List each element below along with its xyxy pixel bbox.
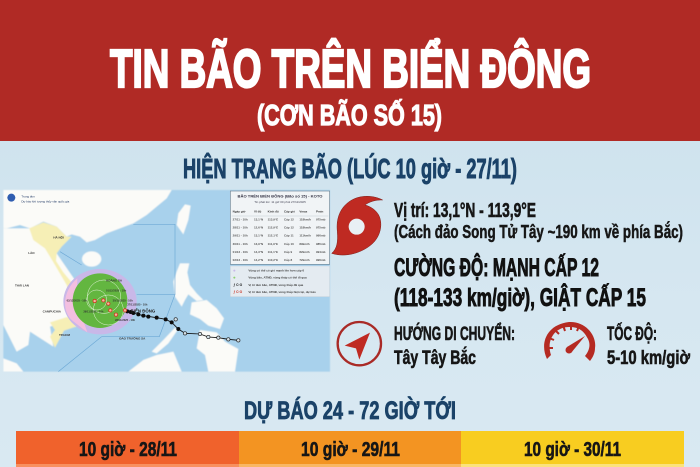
direction label: HƯỚNG DI CHUYỂN: <box>394 323 515 345</box>
forecast table: 975mb <box>316 225 326 229</box>
map legend: ƒ C·O <box>233 283 243 287</box>
map place labels: CAMPUCHIA <box>43 310 62 314</box>
forecast table: 112,9°E <box>268 225 278 229</box>
storm risk zones <box>63 269 137 334</box>
map place labels <box>15 234 156 340</box>
map place labels: 30/11/2025 - 10h <box>113 299 133 303</box>
forecast table: 113,9°E <box>268 217 278 221</box>
forecast table: 111,1°E <box>268 250 278 254</box>
forecast column 1 <box>16 431 239 467</box>
heading: current status: HIỆN TRẠNG BÃO (LÚC 10 giờ - 27/11) <box>183 153 517 184</box>
forecast table: 02/12 - 10h <box>233 258 248 262</box>
forecast table: 990mb <box>316 234 326 238</box>
forecast table: 14,3°N <box>254 250 263 254</box>
forecast column 2 <box>239 431 461 467</box>
page background <box>0 141 700 467</box>
position text: Vị trí: 13,1°N - 113,9°E <box>394 200 536 222</box>
forecast column 3: 10 giờ - 30/11 <box>524 439 621 461</box>
map legend <box>230 266 330 297</box>
agency logo and name <box>7 194 70 204</box>
heading: forecast: DỰ BÁO 24 - 72 GIỜ TỚI <box>244 395 456 425</box>
forecast table: 72km/h <box>299 258 310 262</box>
forecast table: Pmin <box>316 209 323 213</box>
forecast table: 996mb <box>316 258 326 262</box>
forecast table: 12,6°N <box>254 225 263 229</box>
agency logo and name: Dự báo khí tượng thủy văn quốc gia <box>21 200 70 204</box>
forecast table: 13,1°N <box>254 234 263 238</box>
map place labels: HÀ NỘI <box>53 234 64 239</box>
forecast table: 13,9°N <box>254 242 263 246</box>
icon: direction compass <box>338 322 381 365</box>
map legend: Vùng có thể có gió mạnh lên hơn cấp 6 <box>248 269 304 273</box>
map legend: ƒ C·O <box>233 290 243 294</box>
forecast table: 29/11 - 10h <box>233 234 248 238</box>
map place labels: 27/11/2025 - 10h <box>127 303 148 307</box>
forecast table: 994mb <box>316 250 326 254</box>
map place labels: 02/12/2025 - 10h <box>67 298 87 302</box>
subtitle: (CƠN BÃO SỐ 15) <box>257 98 442 132</box>
map place labels: THÁI LAN <box>15 282 29 287</box>
forecast table: 01/12 - 10h <box>233 250 248 254</box>
forecast table: 110,2°E <box>268 258 278 262</box>
forecast table: Vĩ độ <box>254 209 261 213</box>
icon: cyclone <box>332 196 383 255</box>
forecast table: Vmax <box>299 209 308 213</box>
storm track map <box>3 190 330 372</box>
map place labels: 01/12/2025 - 10h <box>106 289 127 293</box>
map legend: Vùng bão, ATNĐ, vùng thấp có thể đi qua <box>248 276 307 280</box>
speed label: TỐC ĐỘ: <box>607 323 657 345</box>
map place labels: 28/11/2025 - 10h <box>115 318 135 322</box>
agency logo and name: Trung tâm <box>21 195 35 199</box>
forecast table: BÃO TRÊN BIỂN ĐÔNG (Bão số 15) - KOTO <box>237 193 322 198</box>
map place labels: HOÀNG SA <box>106 278 123 283</box>
forecast table: Ngày giờ <box>233 209 246 213</box>
icon: speedometer <box>544 322 595 361</box>
forecast positions <box>93 299 127 316</box>
map legend: Vị trí tâm bão, ATNĐ, vùng thấp hiện tại, dự báo <box>248 290 316 294</box>
forecast table: 28/11 - 10h <box>233 225 248 229</box>
forecast table <box>230 191 330 264</box>
forecast table: 985mb <box>316 242 326 246</box>
map place labels: ĐẢO TRƯỜNG SA <box>119 335 146 340</box>
forecast table: 112,1°E <box>268 234 278 238</box>
map place labels: 29/11/2025 - 10h <box>83 310 104 314</box>
header band <box>0 0 700 141</box>
forecast table: Kinh độ <box>268 209 279 213</box>
forecast table: 89km/h <box>299 242 310 246</box>
forecast table: 111,9°E <box>268 242 278 246</box>
map place labels: TP.HCM <box>59 333 71 337</box>
forecast table: Cấp 12 <box>284 225 294 229</box>
forecast table: Cấp gió <box>284 209 295 213</box>
forecast column 2: 10 giờ - 29/11 <box>301 439 400 461</box>
map place labels: BIỂN ĐÔNG <box>131 308 156 313</box>
forecast table: 118km/h <box>299 217 311 221</box>
forecast column 1: 10 giờ - 28/11 <box>79 439 177 461</box>
warning zone lines <box>58 224 175 372</box>
forecast table: Tin phát lúc: 11 giờ 00 phút 27/11/2025 <box>254 200 306 204</box>
forecast table: 13,1°N <box>254 217 263 221</box>
forecast table: 111km/h <box>299 234 311 238</box>
forecast table: Cấp 8 <box>284 258 292 262</box>
map base with sea and land <box>3 190 330 372</box>
past track <box>125 309 240 342</box>
map legend: Vị trí tâm bão, ATNĐ, vùng thấp đã qua <box>248 283 304 287</box>
forecast table: 30/11 - 10h <box>233 242 248 246</box>
forecast table: 975mb <box>316 217 326 221</box>
direction value: Tây Tây Bắc <box>394 347 476 369</box>
forecast column 3 <box>461 431 684 467</box>
forecast table: Cấp 9 <box>284 250 292 254</box>
forecast table: 82km/h <box>299 250 310 254</box>
forecast table: Cấp 12 <box>284 217 294 221</box>
forecast table: Cấp 11 <box>284 234 294 238</box>
map place labels: LÀO <box>28 250 35 255</box>
forecast table: 14,2°N <box>254 258 263 262</box>
forecast table: 27/11 - 10h <box>233 217 248 221</box>
forecast table: 118km/h <box>299 225 311 229</box>
forecast table: Cấp 10 <box>284 242 294 246</box>
